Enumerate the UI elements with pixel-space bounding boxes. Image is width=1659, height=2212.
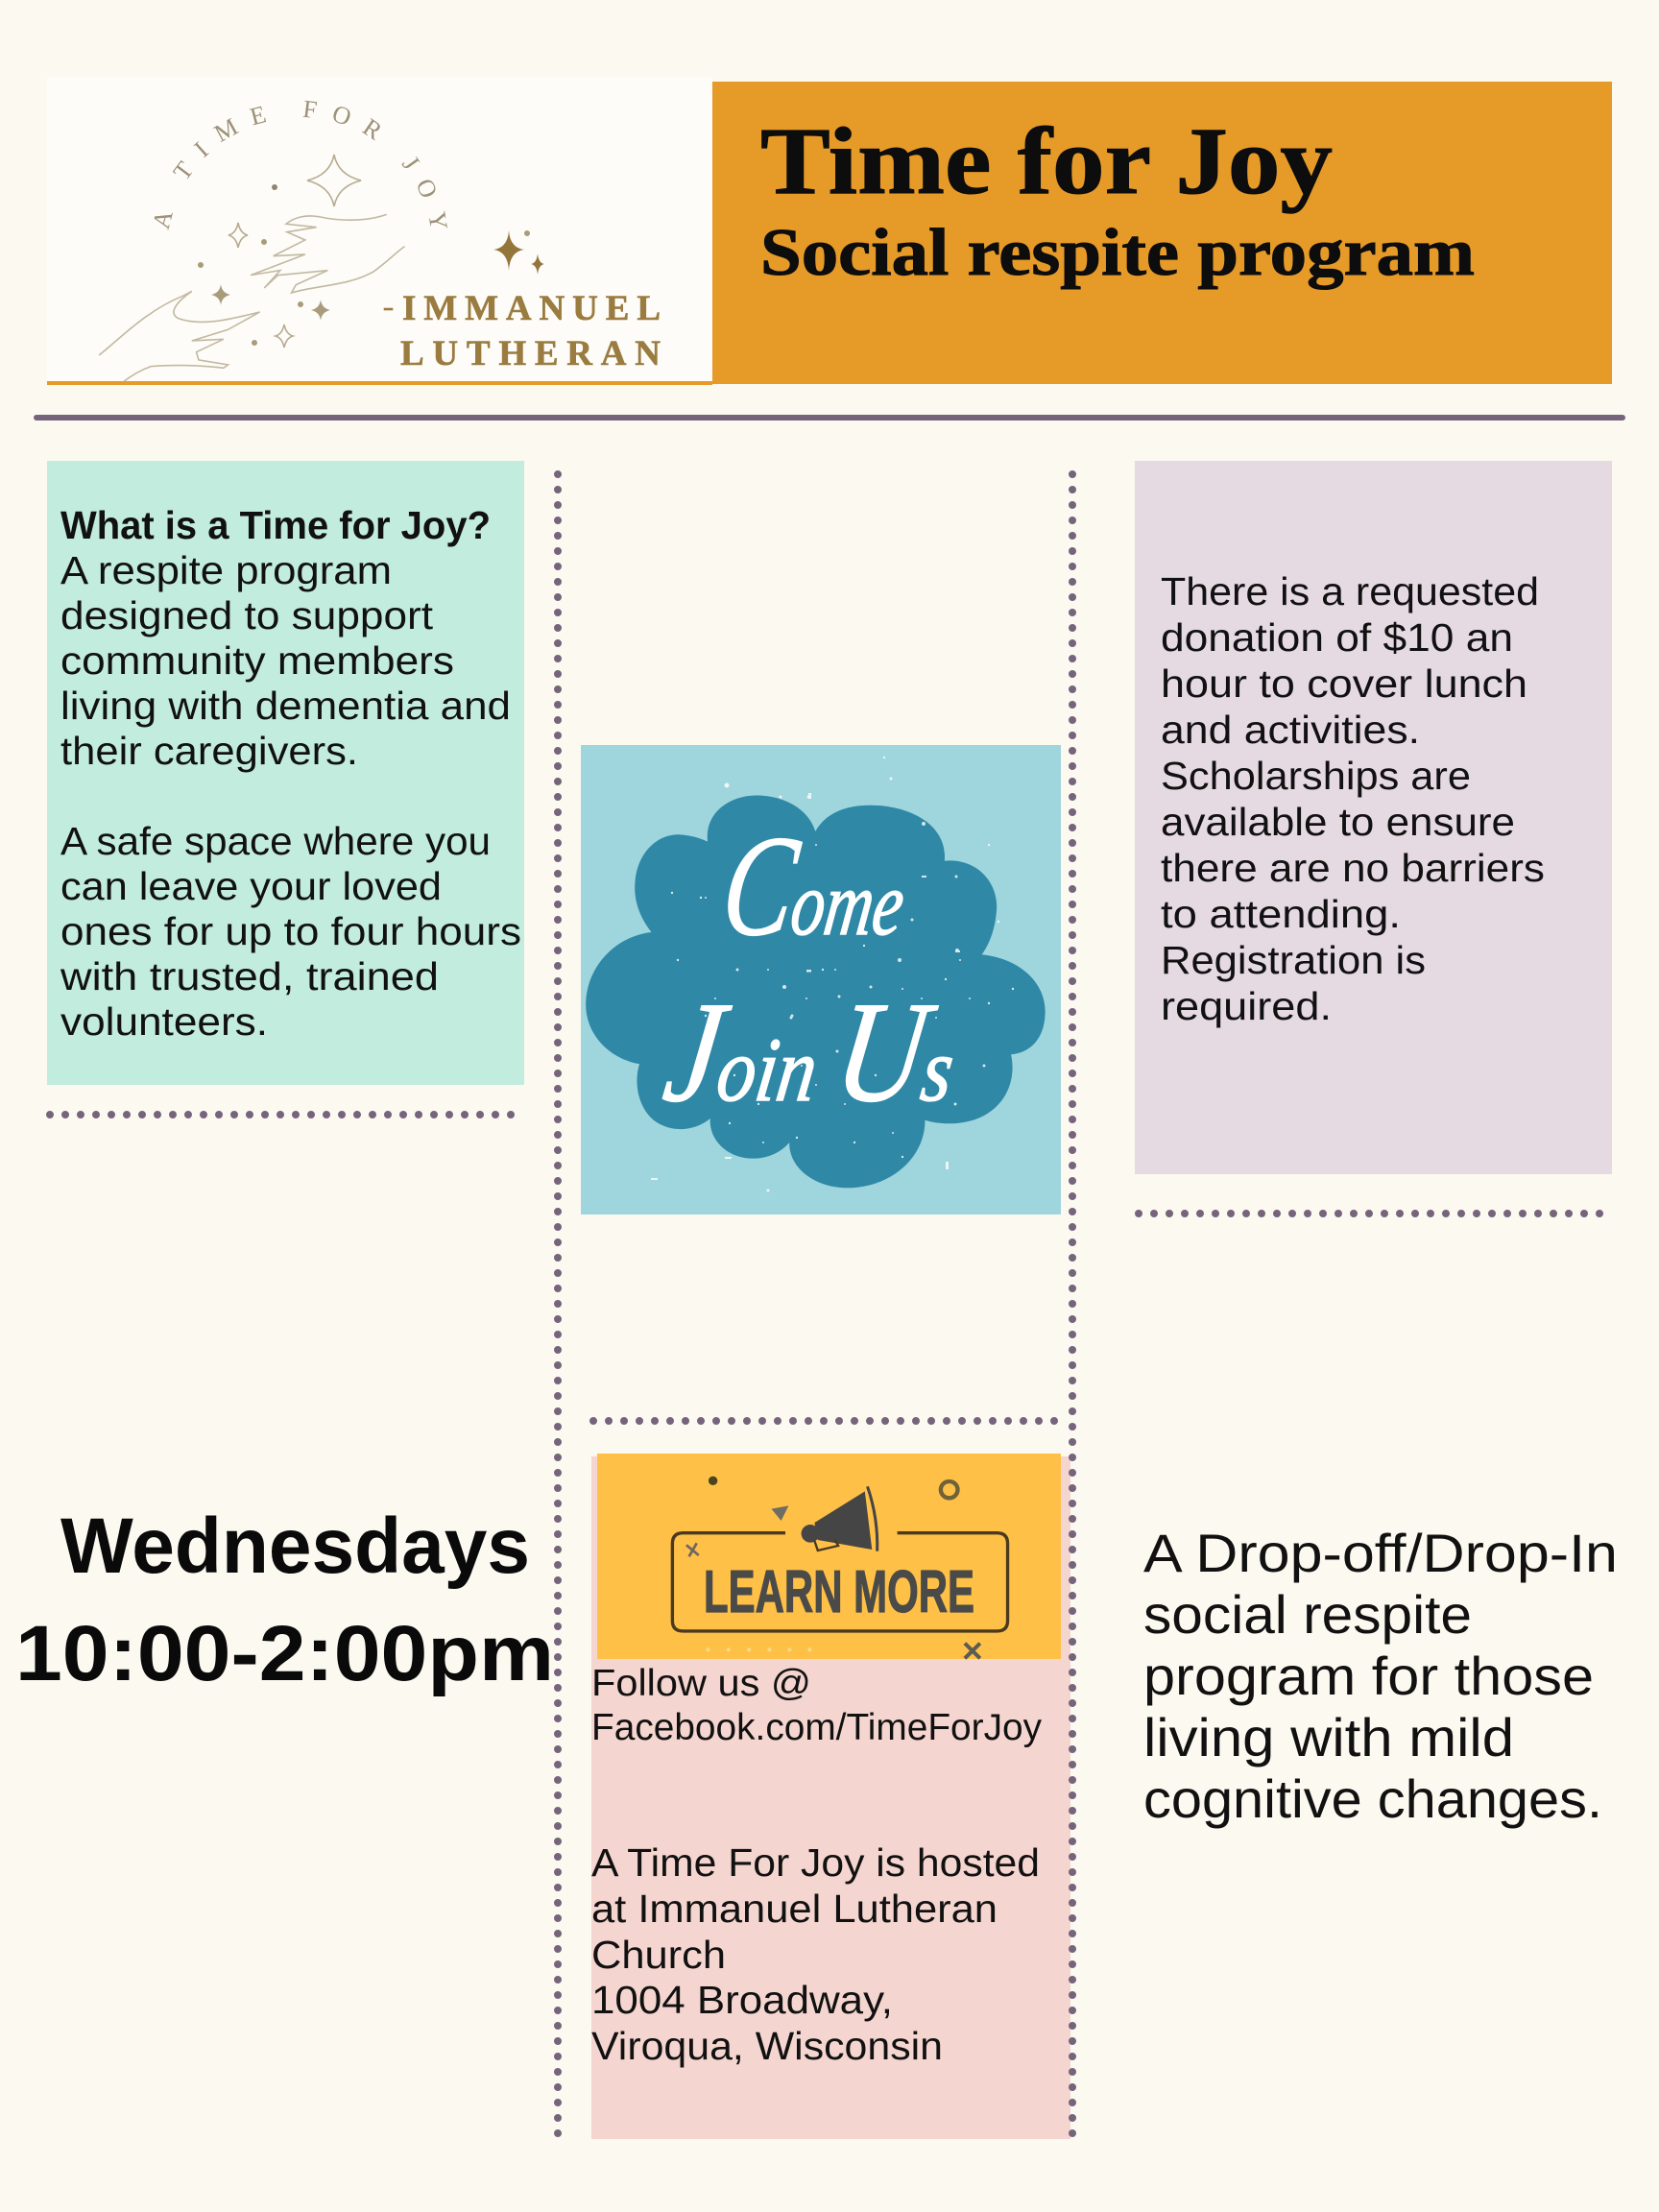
program description text: program for those xyxy=(1143,1646,1594,1706)
button outline xyxy=(672,1533,1008,1631)
logo text: Immanuel Lutheran xyxy=(384,289,661,373)
learn more banner xyxy=(597,1454,1061,1659)
header divider xyxy=(34,415,1625,421)
panel: what is a Time for Joy: A respite program xyxy=(60,548,392,592)
panel: what is a Time for Joy: designed to support xyxy=(60,593,434,637)
header: title banner xyxy=(712,82,1612,384)
social text xyxy=(591,1663,1042,1748)
program description text xyxy=(1143,1523,1618,1829)
learn more label: LEARN MORE xyxy=(704,1559,974,1625)
column dividers xyxy=(558,474,1072,2139)
logo text: Immanuel Lutheran: LUTHERAN xyxy=(400,334,661,373)
panel: come join us graphic xyxy=(581,745,1061,1214)
panel: donation info: donation of $10 an xyxy=(1161,615,1513,660)
schedule text: Wednesdays xyxy=(60,1503,530,1590)
location text: A Time For Joy is hosted xyxy=(591,1840,1040,1885)
come join us text: Come xyxy=(713,805,917,966)
panel: what is a Time for Joy xyxy=(47,461,524,1085)
panel: donation info: and activities. xyxy=(1161,708,1420,752)
icon: sparkles xyxy=(198,155,544,348)
social text: Facebook.com/TimeForJoy xyxy=(591,1707,1042,1748)
logo arc text: A TIME FOR JOY xyxy=(154,100,447,230)
panel: donation info: Registration is xyxy=(1161,938,1426,982)
program description text: social respite xyxy=(1143,1584,1472,1645)
location text xyxy=(591,1840,1040,2068)
come join us text: Join Us xyxy=(656,974,967,1132)
panel: donation info: Scholarships are xyxy=(1161,754,1471,798)
program description text: living with mild xyxy=(1143,1707,1514,1767)
panel: what is a Time for Joy: can leave your loved xyxy=(60,864,442,908)
panel: donation info: to attending. xyxy=(1161,892,1401,936)
icon: cloud xyxy=(586,796,1046,1188)
panel: donation info: There is a requested xyxy=(1161,569,1539,613)
come join us text xyxy=(656,805,967,1132)
icon: reaching hands xyxy=(99,214,405,381)
schedule text: 10:00-2:00pm xyxy=(15,1610,554,1697)
panel: what is a Time for Joy: living with dementia and xyxy=(60,684,511,728)
panel: what is a Time for Joy: with trusted, trained xyxy=(60,954,439,998)
logo text: Immanuel Lutheran: IMMANUEL xyxy=(402,289,661,328)
social text: Follow us @ xyxy=(591,1663,811,1704)
panel: donation info: required. xyxy=(1161,984,1332,1028)
location text: 1004 Broadway, xyxy=(591,1978,893,2022)
panel: donation info: there are no barriers xyxy=(1161,846,1545,890)
icon: megaphone xyxy=(802,1486,878,1551)
location text: Viroqua, Wisconsin xyxy=(591,2024,943,2068)
header: logo panel xyxy=(47,100,712,385)
title: Time for Joy xyxy=(760,108,1333,214)
panel: what is a Time for Joy: What is a Time for Joy? xyxy=(60,503,491,547)
panel: what is a Time for Joy: volunteers. xyxy=(60,999,268,1044)
panel: follow us and location xyxy=(591,1454,1070,2139)
panel: donation info: available to ensure xyxy=(1161,800,1515,844)
panel: what is a Time for Joy: ones for up to four hours xyxy=(60,909,521,953)
speckles xyxy=(651,757,1014,1192)
panel: what is a Time for Joy: community members xyxy=(60,638,454,683)
location text: Church xyxy=(591,1933,726,1977)
panel: what is a Time for Joy: A safe space where you xyxy=(60,819,491,863)
program description text: cognitive changes. xyxy=(1143,1768,1602,1829)
panel: donation info xyxy=(1135,461,1612,1174)
location text: at Immanuel Lutheran xyxy=(591,1887,998,1931)
program description text: A Drop-off/Drop-In xyxy=(1143,1523,1618,1583)
schedule text xyxy=(15,1503,554,1697)
panel: donation info: hour to cover lunch xyxy=(1161,661,1527,706)
subtitle: Social respite program xyxy=(760,216,1475,290)
panel: what is a Time for Joy: their caregivers. xyxy=(60,729,358,773)
